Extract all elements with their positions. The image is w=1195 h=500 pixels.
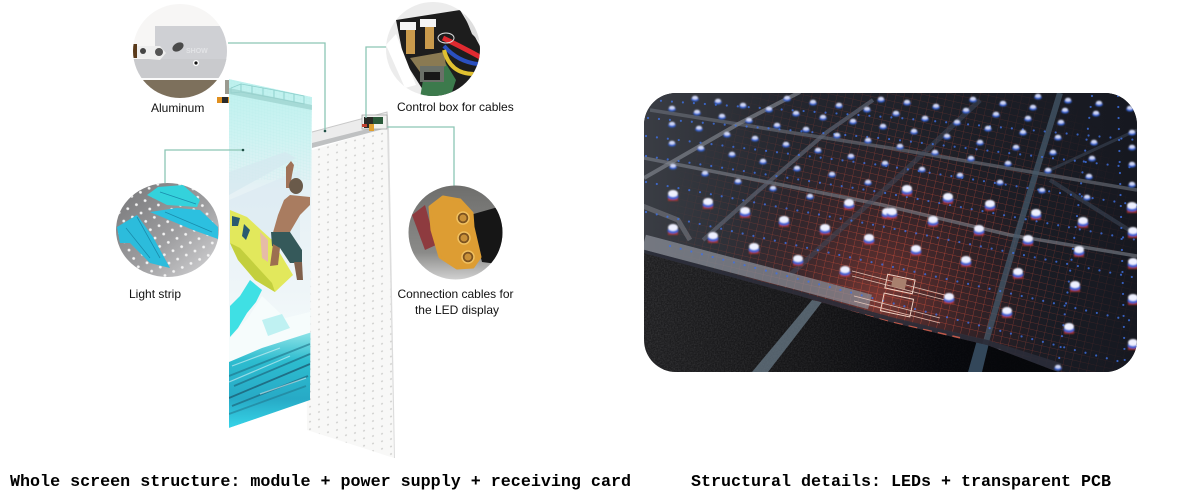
- callout circle: aluminum: [133, 4, 227, 98]
- callout circle: light strip: [116, 183, 219, 277]
- control box on bar: [362, 115, 387, 131]
- label: light strip: Light strip: [129, 287, 181, 301]
- translucent grid strips: [640, 92, 1137, 368]
- callout anchor dots: [242, 130, 326, 151]
- panel: whole screen structure diagram: [114, 0, 514, 458]
- red chip outlines: [852, 271, 945, 323]
- ocean waves: [229, 332, 312, 428]
- label: aluminum: Aluminum: [151, 101, 204, 115]
- panel: structural details photo: [640, 92, 1138, 372]
- callout circle: aluminum: SHOW: [186, 48, 208, 55]
- transparent PCB surface: [640, 92, 1138, 372]
- module frames at top of screen: [231, 84, 304, 104]
- transparent LED back panel: [306, 127, 395, 458]
- label: control box: Control box for cables: [397, 100, 514, 114]
- caption: structural details: Structural details: LEDs + transparent PCB: [691, 473, 1111, 492]
- surfboard: [230, 210, 293, 292]
- sky streak: [229, 178, 259, 195]
- callout circle: control box: [386, 2, 480, 96]
- label: connection cables: Connection cables for: [397, 287, 514, 301]
- ground surface: [644, 93, 1137, 372]
- spray: [229, 296, 310, 362]
- label: the LED display: the LED display: [415, 303, 499, 317]
- callout circle: connection cables: [405, 185, 507, 281]
- white LEDs: [668, 94, 1138, 371]
- LED screen with surfer image: [229, 79, 312, 428]
- small connector at screen corner: [217, 80, 229, 103]
- turquoise splash: [230, 280, 262, 337]
- callout lines: [165, 43, 454, 187]
- surfer figure: [270, 161, 310, 280]
- caption: whole screen structure: Whole screen structure: module + power supply + receiving card: [10, 473, 631, 492]
- blue micro LED rows: [646, 96, 1137, 372]
- aluminum top bar: [312, 112, 388, 148]
